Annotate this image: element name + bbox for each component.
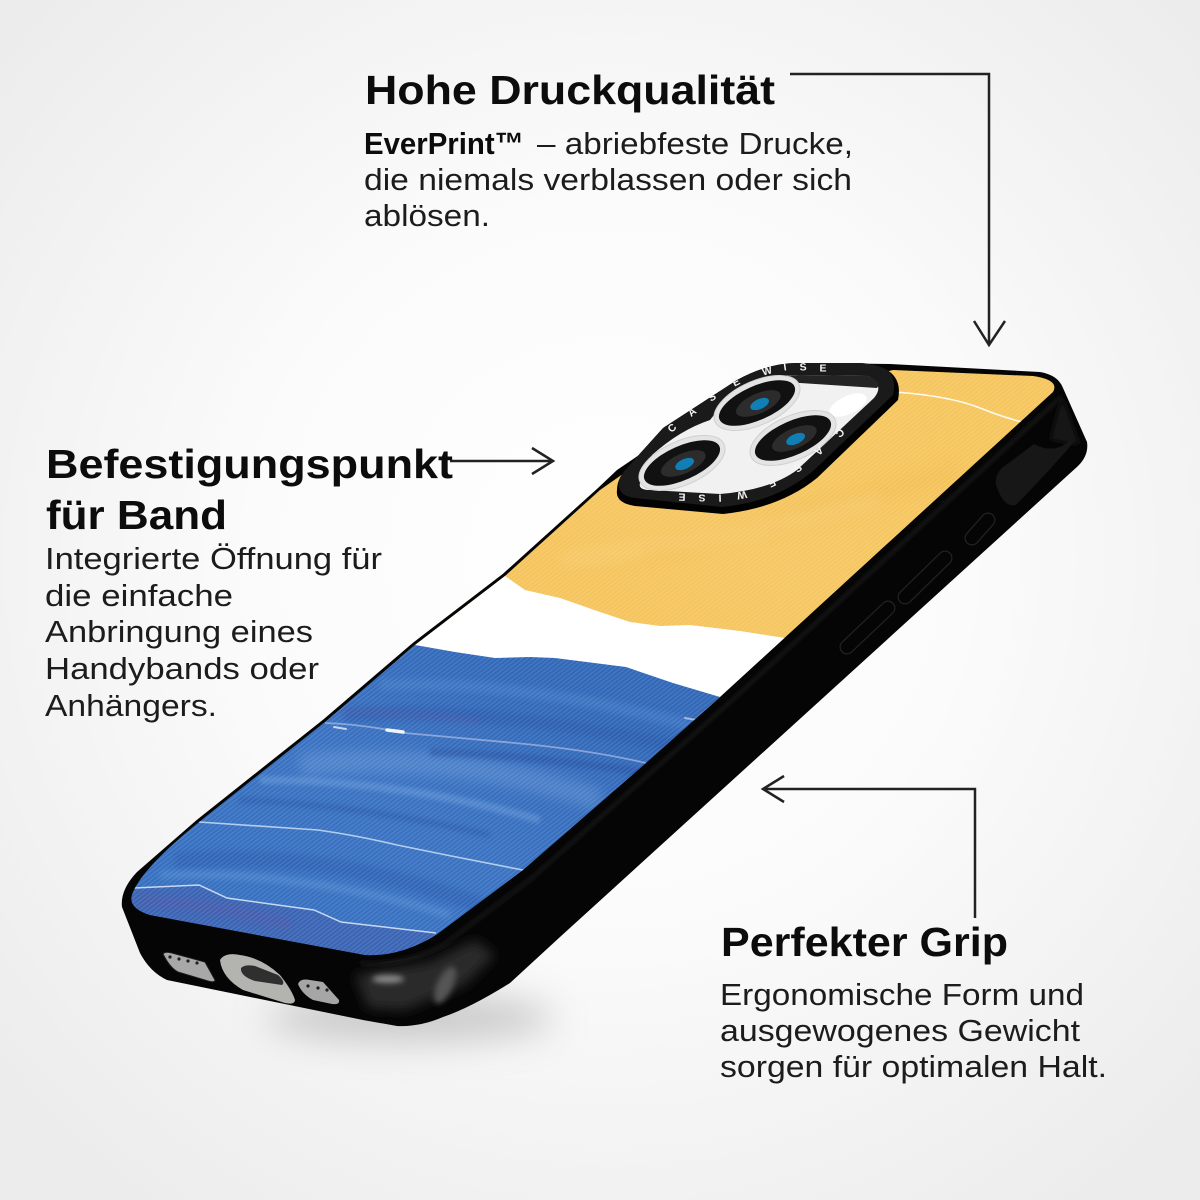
heading: print quality: Hohe Druckqualität xyxy=(365,67,775,113)
brand ring text: I xyxy=(783,361,787,374)
text: grip xyxy=(720,977,1107,1084)
brand ring text: I xyxy=(718,491,722,504)
brand ring text: W xyxy=(761,364,774,379)
blue brush strokes xyxy=(160,684,690,915)
lens 3 xyxy=(631,424,733,502)
phone case illustration xyxy=(100,340,1100,1026)
camera ring top face xyxy=(619,361,894,507)
text: grip: ausgewogenes Gewicht xyxy=(720,1013,1080,1048)
strap attachment point xyxy=(996,440,1074,505)
text: print quality xyxy=(364,126,853,233)
brand ring text: C xyxy=(833,426,847,440)
paint highlights xyxy=(334,718,696,732)
text: print quality: EverPrint™ xyxy=(364,126,524,161)
text: grip: sorgen für optimalen Halt. xyxy=(720,1049,1107,1084)
brand ring text: S xyxy=(706,390,718,404)
lower dark blue wave xyxy=(131,886,436,956)
text: strap point xyxy=(45,541,382,723)
text: strap point: Integrierte Öffnung für xyxy=(45,541,382,576)
text: strap point: Anbringung eines xyxy=(45,614,313,649)
arrow: print quality xyxy=(790,74,1005,345)
yellow washes and white paint streak xyxy=(560,392,1035,560)
text: strap point: Anhängers. xyxy=(45,688,217,723)
case body xyxy=(122,363,1087,1026)
yellow paint xyxy=(400,370,1054,660)
heading: strap point xyxy=(46,441,453,538)
text: strap point: die einfache xyxy=(45,578,233,613)
text: print quality: – abriebfeste Drucke, xyxy=(537,126,853,161)
brand ring text: S xyxy=(799,361,807,374)
brand ring text: E xyxy=(766,476,778,489)
blue paint xyxy=(131,645,720,956)
heading: grip: Perfekter Grip xyxy=(721,919,1008,965)
case edge lip and bottom corner highlights xyxy=(355,395,1080,1010)
brand ring text: E xyxy=(678,490,686,503)
heading: strap point: Befestigungspunkt xyxy=(46,441,453,487)
text: strap point: Handybands oder xyxy=(45,651,319,686)
brand ring text xyxy=(665,361,847,504)
lens 2 xyxy=(742,399,844,477)
brand ring text: A xyxy=(812,444,825,458)
flash xyxy=(826,388,870,422)
phone floor shadow xyxy=(265,994,555,1042)
white band xyxy=(398,576,784,720)
brand ring text: C xyxy=(665,421,679,435)
text: print quality: ablösen. xyxy=(364,198,490,233)
brand ring text: S xyxy=(698,492,706,504)
side buttons xyxy=(847,520,988,647)
brand ring text: A xyxy=(686,405,699,419)
brand ring text: S xyxy=(791,461,804,475)
text: grip: Ergonomische Form und xyxy=(720,977,1084,1012)
lens 1 xyxy=(706,364,808,442)
canvas texture xyxy=(132,370,1054,955)
camera bump xyxy=(617,361,899,514)
brand ring text: E xyxy=(730,376,742,389)
brand ring text: E xyxy=(819,362,827,374)
camera plate xyxy=(640,375,878,494)
arrow: grip xyxy=(763,776,975,918)
arrow: strap point xyxy=(450,448,553,474)
printed back panel xyxy=(131,322,1054,956)
text: print quality: die niemals verblassen oder sich xyxy=(364,162,852,197)
brand ring text: W xyxy=(736,488,748,501)
bottom ports xyxy=(163,952,339,1004)
heading: strap point: für Band xyxy=(46,492,227,538)
